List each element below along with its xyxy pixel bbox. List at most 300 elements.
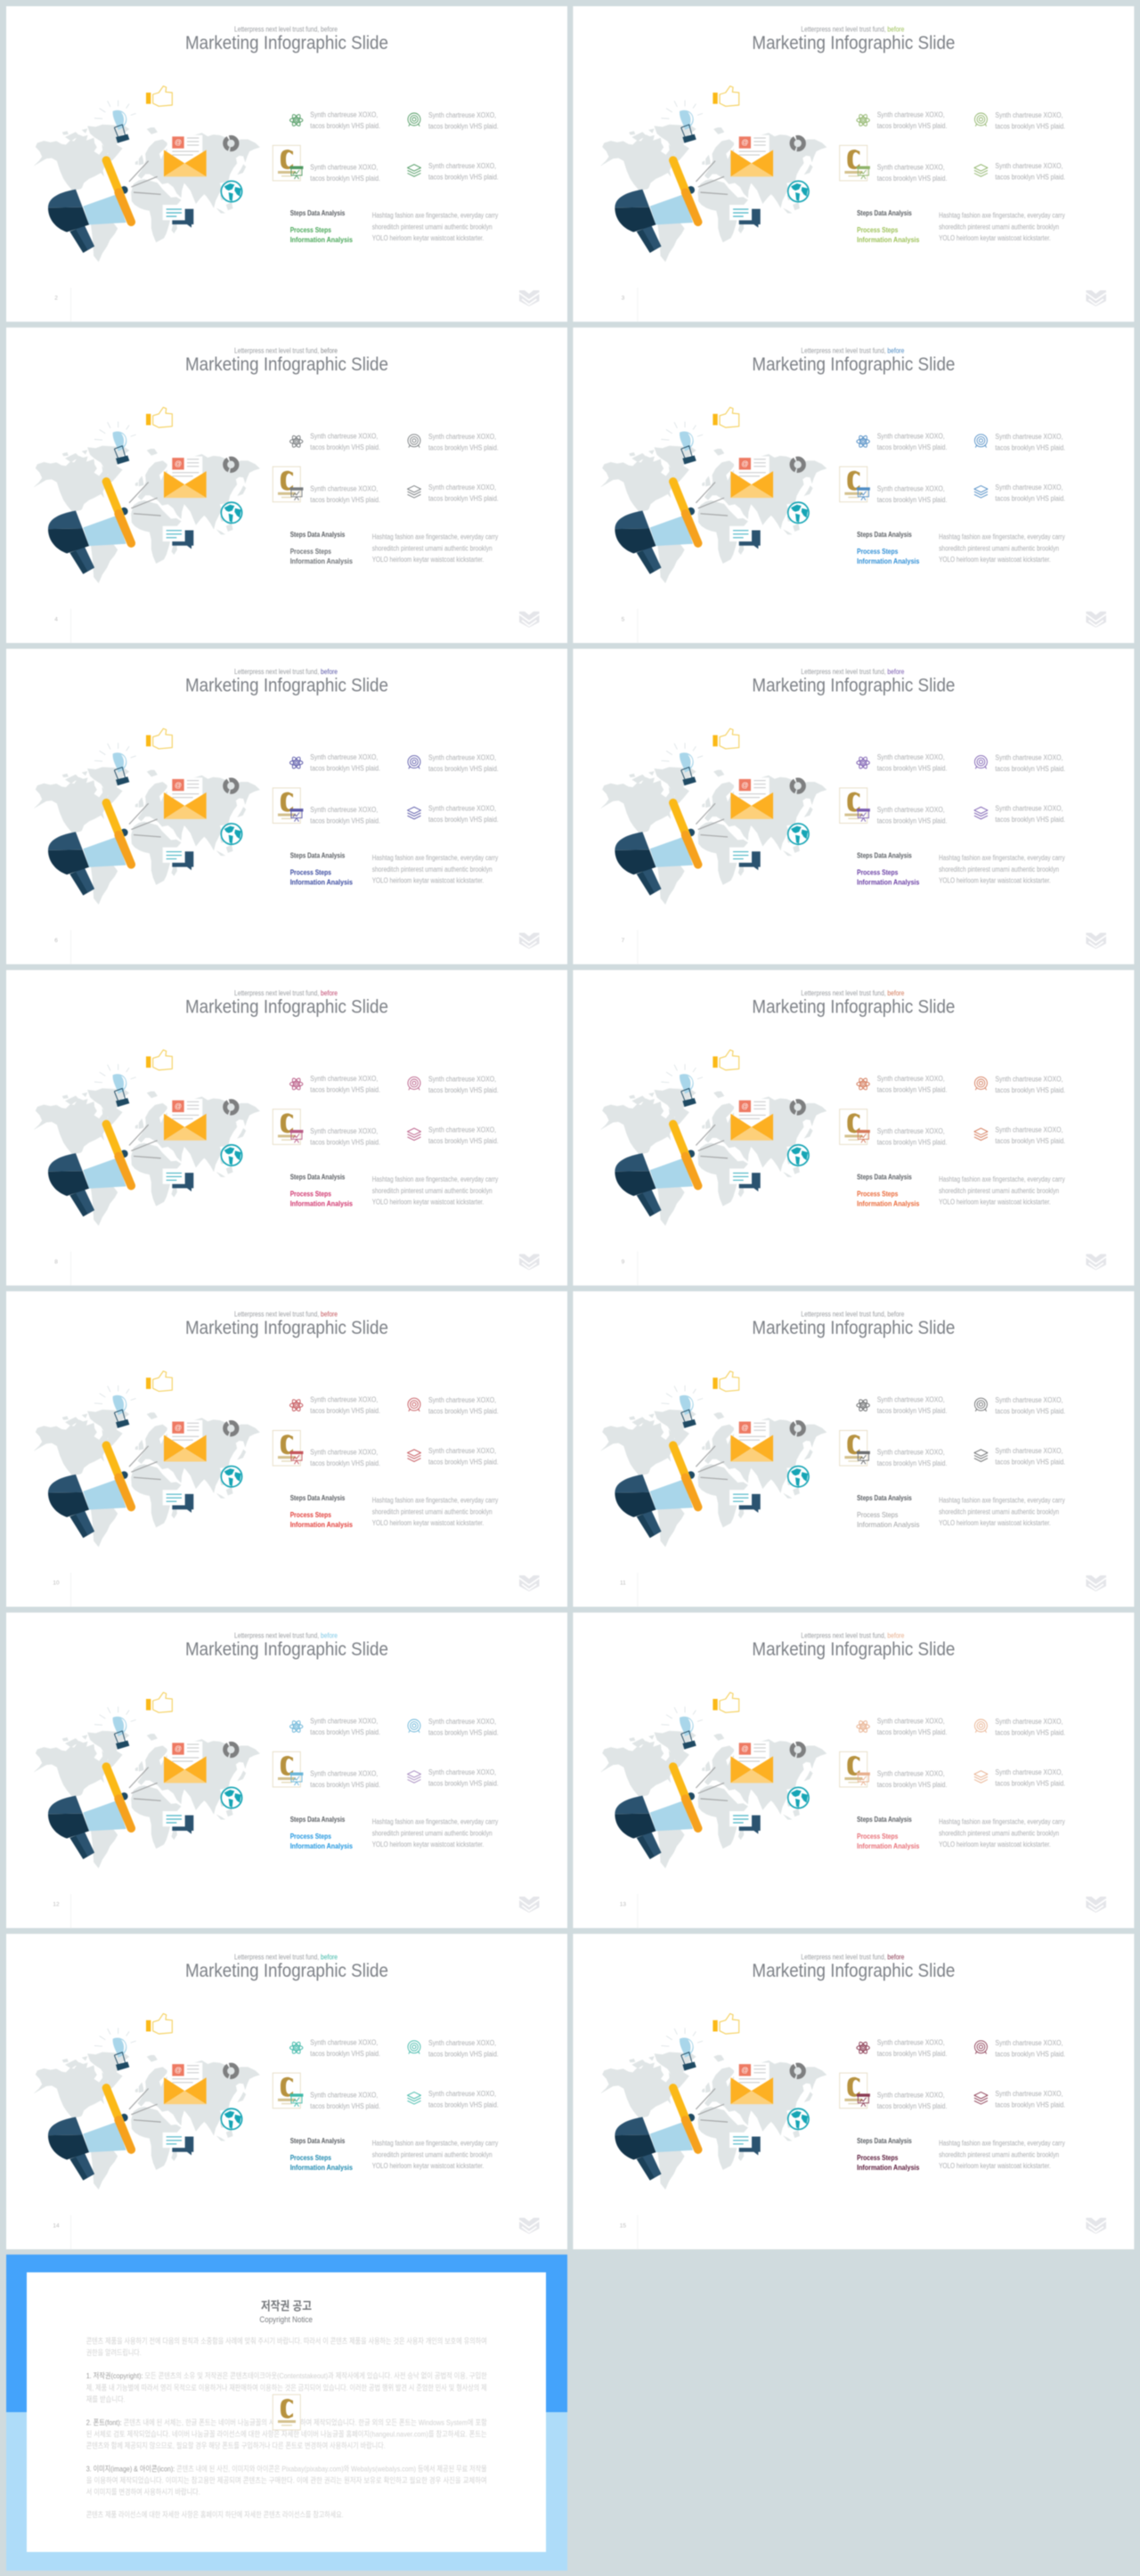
feature text 2 [995, 754, 1065, 773]
feature text 4: tacos brooklyn VHS plaid. [428, 494, 499, 502]
icon: presentation board [290, 488, 303, 500]
feature text 4: tacos brooklyn VHS plaid. [428, 2101, 499, 2109]
icon: megaphone [615, 160, 728, 253]
paragraph: shoreditch pinterest umami authentic brooklyn [939, 2150, 1059, 2158]
feature text 4: tacos brooklyn VHS plaid. [995, 1779, 1065, 1788]
icon: thumbs up [712, 1371, 739, 1392]
title: Marketing Infographic Slide [752, 354, 955, 375]
feature text 1 [310, 1075, 380, 1093]
section 1 copyright: 제, 제품 내 기능별에 따라서 영리 목적으로 이용하거나 재판매하여 이용하는 것은 금지되어 있습니다. 이러한 공법 행위 발견 시 준엄한 민사 및 형사상의 제 [86, 2383, 487, 2392]
feature text 1: Synth chartreuse XOXO, [310, 1075, 378, 1083]
feature text 2: tacos brooklyn VHS plaid. [428, 1408, 499, 1416]
paragraph: shoreditch pinterest umami authentic brooklyn [372, 865, 493, 874]
feature text 3: tacos brooklyn VHS plaid. [877, 1781, 947, 1789]
feature text 2 [428, 433, 499, 451]
title: Marketing Infographic Slide [185, 354, 388, 375]
feature text 1 [877, 110, 947, 130]
paragraph [939, 2139, 1065, 2170]
footer logo [519, 2218, 540, 2234]
feature text 3 [877, 2091, 947, 2110]
icon: envelope [730, 456, 773, 498]
icon: thumbs up [712, 407, 739, 427]
feature text 4: Synth chartreuse XOXO, [995, 805, 1063, 813]
paragraph: shoreditch pinterest umami authentic brooklyn [372, 2150, 493, 2158]
feature text 1: tacos brooklyn VHS plaid. [310, 122, 380, 130]
world map [34, 125, 260, 262]
feature text 1: tacos brooklyn VHS plaid. [877, 1085, 947, 1093]
feature text 2: tacos brooklyn VHS plaid. [995, 1729, 1065, 1736]
feature text 4: tacos brooklyn VHS plaid. [428, 1459, 499, 1467]
process labels: Information Analysis [290, 878, 353, 887]
watermark logo [273, 145, 300, 181]
icon: chat bubbles [729, 2133, 761, 2155]
subtitle: Letterpress next level trust fund, before [801, 988, 905, 997]
feature text 3 [310, 1127, 380, 1146]
feature text 2: tacos brooklyn VHS plaid. [428, 2050, 499, 2058]
feature text 2: Synth chartreuse XOXO, [995, 433, 1063, 441]
paragraph: Hashtag fashion axe fingerstache, everyday carry [372, 1818, 498, 1825]
icon: presentation board [290, 167, 303, 179]
process labels [857, 225, 920, 244]
feature text 2: tacos brooklyn VHS plaid. [428, 1729, 499, 1736]
process labels [857, 547, 920, 565]
feature text 2: Synth chartreuse XOXO, [428, 1396, 496, 1404]
process labels: Process Steps [857, 1832, 899, 1841]
icon: light bulb [661, 101, 703, 143]
feature text 2: tacos brooklyn VHS plaid. [428, 123, 499, 130]
feature text 1: Synth chartreuse XOXO, [877, 1075, 945, 1083]
subtitle: Letterpress next level trust fund, before [801, 25, 905, 34]
title: Marketing Infographic Slide [185, 1961, 388, 1981]
paragraph: Hashtag fashion axe fingerstache, everyday carry [939, 854, 1065, 862]
icon: atom [857, 1719, 869, 1734]
feature text 2: Synth chartreuse XOXO, [995, 2039, 1063, 2047]
icon: thumbs up [712, 1050, 739, 1070]
feature text 3 [877, 806, 947, 825]
feature text 2: Synth chartreuse XOXO, [428, 1718, 496, 1726]
feature text 1: tacos brooklyn VHS plaid. [310, 765, 380, 773]
icon: target [974, 1077, 987, 1090]
icon: donut chart [225, 780, 237, 792]
title: Marketing Infographic Slide [185, 676, 388, 696]
feature text 1: Synth chartreuse XOXO, [877, 432, 945, 440]
process labels: Information Analysis [290, 2163, 353, 2172]
feature text 1: Synth chartreuse XOXO, [310, 432, 378, 440]
icon: target [974, 1398, 987, 1411]
world map [601, 1410, 826, 1547]
icon: presentation board [290, 1451, 303, 1464]
title: Marketing Infographic Slide [752, 33, 955, 53]
watermark logo [840, 467, 867, 502]
process labels [857, 1510, 919, 1529]
title: Marketing Infographic Slide [185, 996, 388, 1017]
paragraph: YOLO heirloom keytar waistcoat kickstarter. [939, 1198, 1051, 1206]
icon: chat bubbles [163, 1490, 193, 1513]
steps heading: Steps Data Analysis [857, 1493, 912, 1502]
feature text 2 [995, 1075, 1065, 1094]
paragraph [372, 1175, 498, 1206]
icon: layers [974, 807, 988, 819]
section 3 image and icon: 서 이미지를 변경하여 사용하시기 바랍니다. [86, 2487, 200, 2496]
icon: megaphone [615, 1445, 728, 1538]
section 3 image and icon [86, 2464, 487, 2496]
feature text 3: tacos brooklyn VHS plaid. [310, 496, 380, 504]
feature text 2 [428, 111, 499, 130]
feature text 1 [877, 1075, 947, 1093]
icon: donut chart [225, 137, 237, 150]
process labels: Information Analysis [857, 1841, 920, 1850]
steps heading: Steps Data Analysis [857, 208, 912, 217]
process labels: Information Analysis [290, 235, 353, 244]
footer logo [1086, 1254, 1106, 1270]
subtitle: Letterpress next level trust fund, before [801, 1952, 905, 1961]
feature text 3: tacos brooklyn VHS plaid. [877, 2102, 947, 2110]
panel: slide 5 blue [573, 328, 1134, 643]
page number: 4 [54, 616, 58, 622]
icon: envelope [164, 456, 207, 498]
feature text 1: Synth chartreuse XOXO, [877, 753, 945, 761]
process labels [290, 1832, 353, 1850]
process labels: Process Steps [290, 547, 331, 556]
icon: globe [788, 2109, 809, 2129]
steps heading: Steps Data Analysis [290, 208, 346, 217]
process labels: Information Analysis [290, 1520, 353, 1529]
paragraph: YOLO heirloom keytar waistcoat kickstarter. [372, 1198, 484, 1206]
icon: thumbs up [146, 728, 172, 749]
feature text 1 [310, 432, 380, 451]
feature text 2: Synth chartreuse XOXO, [995, 1075, 1063, 1083]
feature text 2 [428, 754, 499, 773]
feature text 4: tacos brooklyn VHS plaid. [995, 494, 1065, 502]
feature text 4 [995, 1768, 1065, 1788]
page number: 3 [622, 296, 625, 301]
icon: thumbs up [146, 2013, 172, 2034]
feature text 2: Synth chartreuse XOXO, [995, 1718, 1063, 1726]
icon: chat bubbles [163, 1811, 193, 1834]
watermark logo [840, 788, 867, 823]
feature text 2 [995, 433, 1065, 451]
panel: slide 9 orange [573, 970, 1134, 1286]
icon: globe [788, 1145, 809, 1166]
icon: layers [408, 1128, 420, 1141]
section 1 copyright [86, 2371, 487, 2404]
feature text 3: tacos brooklyn VHS plaid. [877, 817, 947, 825]
copyright subtitle: Copyright Notice [259, 2315, 313, 2325]
paragraph: shoreditch pinterest umami authentic brooklyn [372, 1829, 493, 1838]
feature text 4 [995, 1447, 1065, 1467]
icon: chat bubbles [163, 526, 193, 549]
paragraph: shoreditch pinterest umami authentic brooklyn [939, 223, 1059, 232]
process labels [857, 1832, 920, 1850]
icon: target [408, 113, 420, 126]
page number: 14 [53, 2223, 60, 2229]
icon: globe [788, 1467, 809, 1487]
footer logo [1086, 1575, 1106, 1591]
watermark logo [273, 788, 300, 823]
icon: globe [788, 502, 809, 523]
world map [601, 125, 826, 262]
feature text 4: tacos brooklyn VHS plaid. [428, 1779, 499, 1788]
process labels: Process Steps [857, 868, 899, 877]
icon: chat bubbles [729, 526, 761, 549]
feature text 4 [428, 2090, 499, 2109]
title: Marketing Infographic Slide [185, 1639, 388, 1660]
feature text 3 [310, 2091, 380, 2110]
icon: presentation board [857, 1773, 869, 1785]
feature text 4: Synth chartreuse XOXO, [995, 2090, 1063, 2098]
icon: megaphone [48, 803, 161, 896]
page number: 5 [622, 616, 625, 622]
feature text 3 [877, 484, 947, 504]
icon: layers [974, 1128, 988, 1141]
feature text 1 [310, 753, 380, 773]
process labels [290, 868, 353, 887]
icon: globe [788, 181, 809, 202]
icon: thumbs up [712, 2013, 739, 2034]
feature text 2: Synth chartreuse XOXO, [428, 754, 496, 762]
footer logo [519, 1897, 540, 1913]
feature text 2: Synth chartreuse XOXO, [995, 111, 1063, 119]
feature text 4: Synth chartreuse XOXO, [995, 1447, 1063, 1455]
feature text 2 [428, 1075, 499, 1094]
icon: presentation board [290, 2094, 303, 2107]
world map [34, 446, 260, 583]
feature text 1: tacos brooklyn VHS plaid. [310, 1085, 380, 1093]
feature text 3: tacos brooklyn VHS plaid. [310, 817, 380, 825]
section 1 copyright: 재를 받습니다. [86, 2395, 126, 2404]
icon: chat bubbles [163, 1168, 193, 1191]
feature text 3: tacos brooklyn VHS plaid. [310, 1459, 380, 1467]
paragraph: Hashtag fashion axe fingerstache, everyday carry [939, 212, 1065, 219]
watermark logo [840, 1109, 867, 1144]
subtitle: Letterpress next level trust fund, before [801, 345, 905, 354]
icon: light bulb [661, 1064, 703, 1107]
icon: light bulb [94, 2027, 136, 2070]
icon: megaphone [48, 2088, 161, 2181]
paragraph: YOLO heirloom keytar waistcoat kickstarter. [372, 556, 484, 564]
footer logo [1086, 2218, 1106, 2234]
subtitle: Letterpress next level trust fund, before [234, 25, 338, 34]
page number: 6 [54, 938, 58, 944]
process labels: Information Analysis [857, 235, 920, 244]
feature text 4: Synth chartreuse XOXO, [428, 162, 496, 170]
footer logo [519, 1254, 540, 1270]
title: Marketing Infographic Slide [752, 996, 955, 1017]
icon: envelope [730, 1099, 773, 1141]
steps heading: Steps Data Analysis [290, 2136, 346, 2145]
feature text 3: Synth chartreuse XOXO, [310, 484, 378, 492]
icon: chat bubbles [729, 1490, 761, 1513]
process labels: Information Analysis [290, 1199, 353, 1207]
icon: light bulb [661, 2027, 703, 2070]
icon: target [408, 1719, 420, 1733]
icon: donut chart [225, 459, 237, 470]
feature text 2: tacos brooklyn VHS plaid. [428, 443, 499, 451]
subtitle: Letterpress next level trust fund, before [234, 1631, 338, 1640]
process labels [290, 1189, 353, 1207]
icon: target [974, 113, 987, 126]
icon: layers [974, 486, 988, 498]
icon: donut chart [792, 1743, 803, 1756]
closing note: 콘텐츠 제품 라이선스에 대한 자세한 사항은 홈페이지 하단에 자세한 콘텐츠 라이선스를 참고하세요. [86, 2510, 344, 2519]
icon: presentation board [857, 809, 869, 822]
process labels: Process Steps [290, 1510, 331, 1519]
feature text 2 [428, 1396, 499, 1416]
watermark logo [273, 2394, 300, 2430]
feature text 1: Synth chartreuse XOXO, [310, 753, 378, 761]
feature text 2 [995, 2039, 1065, 2058]
feature text 3 [310, 806, 380, 825]
panel: slide 15 maroon [573, 1934, 1134, 2249]
icon: donut chart [792, 459, 803, 470]
steps heading: Steps Data Analysis [290, 1493, 346, 1502]
feature text 2: tacos brooklyn VHS plaid. [428, 765, 499, 773]
paragraph [372, 854, 498, 885]
feature text 2: tacos brooklyn VHS plaid. [995, 123, 1065, 130]
page number: 10 [53, 1581, 60, 1587]
icon: globe [221, 181, 242, 202]
icon: donut chart [225, 1423, 237, 1434]
icon: envelope [164, 1420, 207, 1462]
feature text 3: tacos brooklyn VHS plaid. [877, 496, 947, 504]
feature text 1: Synth chartreuse XOXO, [877, 110, 945, 119]
paragraph: Hashtag fashion axe fingerstache, everyday carry [939, 532, 1065, 540]
world map [601, 2052, 826, 2190]
world map [601, 446, 826, 583]
paragraph: Hashtag fashion axe fingerstache, everyday carry [939, 1497, 1065, 1505]
paragraph: shoreditch pinterest umami authentic brooklyn [939, 865, 1059, 874]
icon: layers [974, 1771, 988, 1783]
feature text 1 [310, 110, 380, 130]
paragraph: shoreditch pinterest umami authentic brooklyn [372, 1187, 493, 1195]
paragraph: shoreditch pinterest umami authentic brooklyn [939, 1508, 1059, 1516]
footer logo [1086, 290, 1106, 306]
feature text 3: Synth chartreuse XOXO, [877, 1770, 945, 1777]
feature text 1: Synth chartreuse XOXO, [877, 2038, 945, 2046]
footer logo [519, 612, 540, 628]
icon: presentation board [857, 167, 869, 179]
icon: globe [221, 1787, 242, 1808]
subtitle: Letterpress next level trust fund, before [234, 988, 338, 997]
icon: megaphone [48, 1767, 161, 1859]
title: Marketing Infographic Slide [752, 1318, 955, 1338]
icon: chat bubbles [163, 2133, 193, 2155]
feature text 4 [428, 162, 499, 182]
feature text 4: tacos brooklyn VHS plaid. [995, 1459, 1065, 1467]
icon: atom [857, 1399, 869, 1412]
icon: layers [974, 1450, 988, 1461]
feature text 3 [310, 484, 380, 504]
icon: megaphone [48, 1445, 161, 1538]
paragraph: Hashtag fashion axe fingerstache, everyday carry [372, 854, 498, 862]
icon: presentation board [290, 1130, 303, 1142]
feature text 2: tacos brooklyn VHS plaid. [995, 1086, 1065, 1094]
process labels: Process Steps [290, 2153, 331, 2162]
feature text 1: Synth chartreuse XOXO, [310, 1717, 378, 1726]
steps heading: Steps Data Analysis [290, 1172, 346, 1181]
feature text 3: tacos brooklyn VHS plaid. [310, 2102, 380, 2110]
process labels [857, 1189, 920, 1207]
feature text 4: Synth chartreuse XOXO, [995, 162, 1063, 170]
feature text 1: tacos brooklyn VHS plaid. [310, 1407, 380, 1415]
icon: presentation board [857, 1451, 869, 1464]
feature text 3: Synth chartreuse XOXO, [310, 2091, 378, 2099]
paragraph: YOLO heirloom keytar waistcoat kickstarter. [939, 556, 1051, 564]
feature text 1 [310, 1396, 380, 1415]
icon: donut chart [225, 2065, 237, 2076]
icon: layers [974, 2092, 988, 2104]
feature text 4: tacos brooklyn VHS plaid. [428, 1137, 499, 1145]
icon: envelope [730, 135, 773, 176]
paragraph [939, 1818, 1065, 1849]
paragraph: YOLO heirloom keytar waistcoat kickstarter. [939, 1519, 1051, 1527]
feature text 1: tacos brooklyn VHS plaid. [877, 443, 947, 451]
feature text 3: Synth chartreuse XOXO, [310, 164, 378, 171]
feature text 2: tacos brooklyn VHS plaid. [995, 1408, 1065, 1416]
paragraph [939, 212, 1065, 242]
feature text 4: tacos brooklyn VHS plaid. [428, 816, 499, 824]
feature text 3: tacos brooklyn VHS plaid. [310, 1781, 380, 1789]
feature text 4: Synth chartreuse XOXO, [428, 1768, 496, 1776]
footer logo [519, 933, 540, 949]
feature text 3 [310, 164, 380, 183]
icon: layers [974, 165, 988, 176]
icon: presentation board [857, 488, 869, 500]
feature text 4 [995, 805, 1065, 824]
feature text 1: Synth chartreuse XOXO, [877, 1717, 945, 1726]
paragraph: YOLO heirloom keytar waistcoat kickstarter. [372, 234, 484, 242]
feature text 4 [428, 1125, 499, 1145]
paragraph: shoreditch pinterest umami authentic brooklyn [372, 1508, 493, 1516]
icon: envelope [730, 2062, 773, 2104]
feature text 4: Synth chartreuse XOXO, [428, 805, 496, 813]
subtitle: Letterpress next level trust fund, before [234, 667, 338, 676]
section 2 font: 된 서체로 검토 제작되었습니다. 네이버 나눔글꼴 라이선스에 대한 사항은 자세한 네이버 나눔글꼴 홈페이지(hangeul.naver.com)를 참고하세요. 폰트는 [86, 2430, 487, 2439]
feature text 4: tacos brooklyn VHS plaid. [995, 2101, 1065, 2109]
feature text 3: Synth chartreuse XOXO, [877, 2091, 945, 2099]
icon: globe [788, 1787, 809, 1808]
world map [34, 1088, 260, 1225]
process labels: Information Analysis [290, 557, 353, 565]
panel: slide 10 red [6, 1291, 567, 1606]
paragraph: Hashtag fashion axe fingerstache, everyday carry [939, 2139, 1065, 2147]
paragraph: shoreditch pinterest umami authentic brooklyn [939, 1187, 1059, 1195]
icon: megaphone [615, 1124, 728, 1216]
page number: 13 [620, 1902, 626, 1907]
paragraph: Hashtag fashion axe fingerstache, everyday carry [372, 2139, 498, 2147]
icon: megaphone [615, 1767, 728, 1859]
feature text 3: Synth chartreuse XOXO, [877, 164, 945, 171]
feature text 1: Synth chartreuse XOXO, [310, 1396, 378, 1404]
icon: light bulb [661, 421, 703, 464]
icon: light bulb [661, 1707, 703, 1750]
process labels [290, 1510, 353, 1529]
icon: thumbs up [712, 1693, 739, 1712]
steps heading: Steps Data Analysis [857, 2136, 912, 2145]
icon: globe [221, 1467, 242, 1487]
feature text 1: tacos brooklyn VHS plaid. [310, 443, 380, 451]
steps heading: Steps Data Analysis [290, 530, 346, 539]
icon: light bulb [94, 1386, 136, 1428]
feature text 3 [877, 1449, 947, 1467]
icon: thumbs up [146, 1371, 172, 1392]
icon: thumbs up [146, 1693, 172, 1712]
feature text 3: Synth chartreuse XOXO, [310, 806, 378, 814]
feature text 1: tacos brooklyn VHS plaid. [877, 122, 947, 130]
watermark logo [840, 1430, 867, 1466]
feature text 3: tacos brooklyn VHS plaid. [877, 1459, 947, 1467]
title: Marketing Infographic Slide [185, 33, 388, 53]
